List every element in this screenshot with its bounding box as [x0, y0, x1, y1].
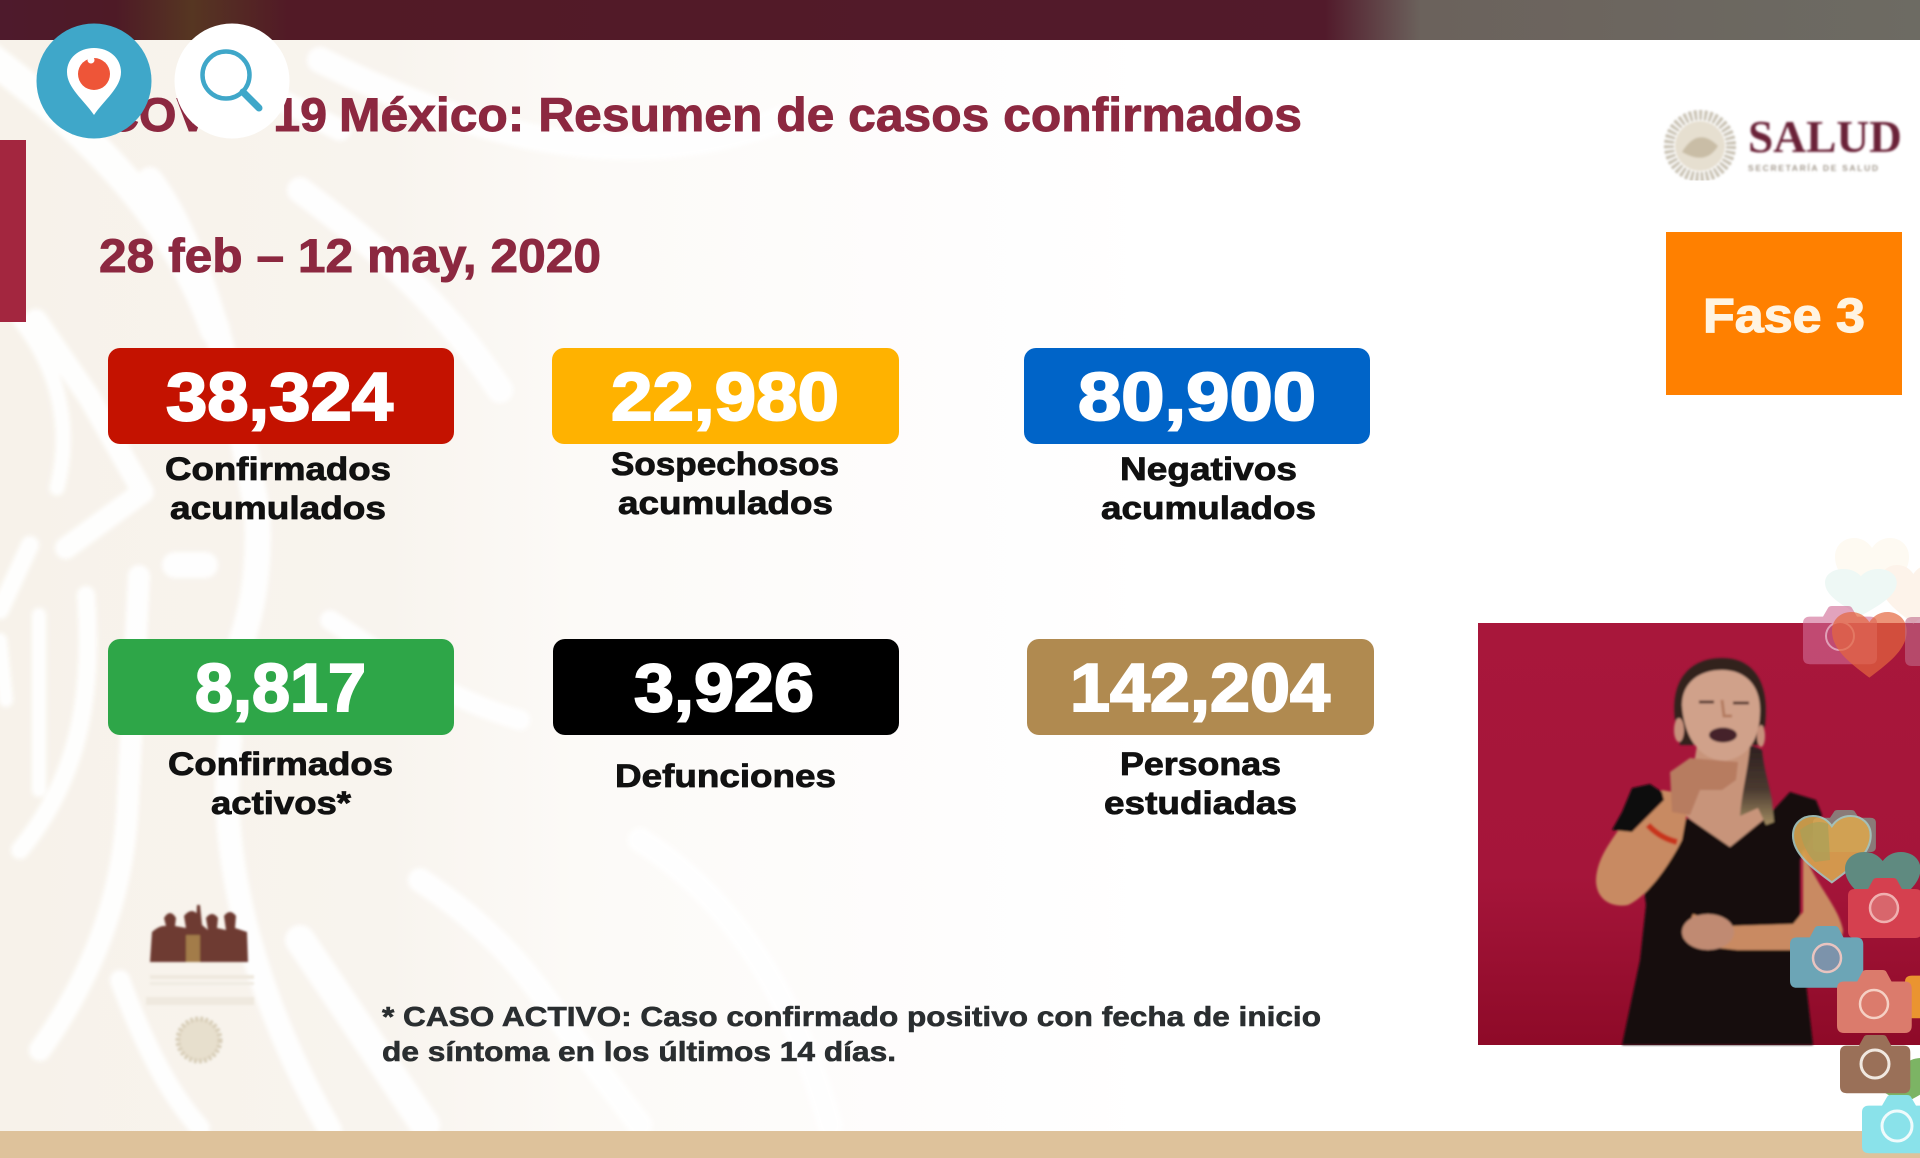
- icon: national emblem: [1669, 115, 1731, 177]
- black top: [1622, 792, 1822, 1045]
- neck and chest: [1686, 745, 1770, 850]
- brown camera: [1840, 1035, 1910, 1093]
- stat: defunciones: Defunciones: [615, 758, 836, 794]
- stat: sospechosos acumulados: acumulados: [618, 485, 833, 521]
- title: COVID-19: [104, 88, 327, 141]
- salmon camera: [1837, 970, 1912, 1033]
- red camera: [1848, 878, 1920, 938]
- faint peach heart: [1880, 565, 1920, 624]
- mouth: [1709, 728, 1737, 742]
- stat: confirmados acumulados: Confirmados: [165, 451, 391, 487]
- stat: confirmados activos: activos*: [211, 785, 352, 821]
- stat: defunciones: 3,926: [634, 650, 814, 726]
- pink camera: [1803, 606, 1877, 664]
- orange-red heart: [1832, 612, 1907, 678]
- phase badge: [1666, 232, 1902, 395]
- right arm and forearm: [1683, 850, 1843, 950]
- hair tail: [1740, 745, 1774, 825]
- grey camera: [1813, 810, 1876, 852]
- logo: Salud: [1669, 112, 1902, 177]
- left sleeve: [1612, 784, 1664, 832]
- faint cream heart: [1835, 538, 1909, 603]
- stat: confirmados acumulados: acumulados: [170, 490, 386, 526]
- stat: sospechosos acumulados: [552, 348, 899, 521]
- icon: figures silhouette: [150, 905, 248, 962]
- face: [1682, 670, 1760, 761]
- stat: personas estudiadas: [1027, 639, 1374, 821]
- title: México: Resumen de casos confirmados: [339, 88, 1302, 141]
- stat: confirmados activos: [108, 639, 454, 821]
- faint teal heart: [1825, 569, 1897, 616]
- stat: negativos acumulados: [1024, 348, 1370, 526]
- top browser bar: [0, 0, 1920, 40]
- stat: defunciones: [553, 639, 899, 794]
- interpreter figure: [1596, 658, 1843, 1045]
- logo: historical figures and emblem: [146, 905, 254, 1061]
- stat: sospechosos acumulados: Sospechosos: [611, 446, 839, 482]
- eyes and glasses: [1699, 702, 1749, 703]
- stat: confirmados activos: Confirmados: [168, 746, 393, 782]
- background ornamental pattern: [0, 50, 830, 1130]
- green heart: [1867, 1058, 1920, 1104]
- stat: personas estudiadas: 142,204: [1070, 650, 1330, 726]
- sign language interpreter video: [1478, 623, 1920, 1045]
- stat: negativos acumulados: acumulados: [1101, 490, 1316, 526]
- cyan camera: [1862, 1095, 1920, 1153]
- left forearm: [1596, 790, 1690, 906]
- footnote: * CASO ACTIVO: Caso confirmado positivo con fecha de inicio: [382, 1001, 1321, 1032]
- pink camera right: [1905, 606, 1920, 666]
- logo: Salud: SALUD: [1748, 112, 1902, 162]
- stat: personas estudiadas: estudiadas: [1104, 785, 1297, 821]
- orange camera: [1905, 966, 1920, 1018]
- stat: sospechosos acumulados: 22,980: [611, 359, 839, 435]
- stat: personas estudiadas: Personas: [1120, 746, 1281, 782]
- icon: search button: [174, 24, 290, 138]
- stat: negativos acumulados: 80,900: [1078, 359, 1316, 435]
- nose: [1722, 700, 1732, 716]
- date range subtitle: 28 feb – 12 may, 2020: [99, 229, 601, 282]
- bottom tan band: [0, 1131, 1920, 1158]
- footnote: de síntoma en los últimos 14 días.: [382, 1036, 896, 1067]
- golden heart: [1793, 816, 1871, 882]
- logo: Salud: SECRETARÍA DE SALUD: [1748, 163, 1878, 173]
- icon: periscope pin button: [36, 24, 152, 138]
- stat: negativos acumulados: Negativos: [1120, 451, 1297, 487]
- ears: [1674, 718, 1684, 742]
- stat: confirmados activos: 8,817: [195, 650, 366, 726]
- hand across body: [1682, 914, 1734, 950]
- phase badge: Fase 3: [1703, 290, 1865, 343]
- bracelet: [1648, 825, 1677, 842]
- stat: confirmados acumulados: [108, 348, 454, 526]
- floating reactions: hearts and cameras: [1790, 538, 1920, 1153]
- hair back: [1674, 658, 1766, 745]
- blue camera: [1790, 926, 1863, 988]
- teal heart: [1845, 852, 1920, 910]
- stat: confirmados acumulados: 38,324: [166, 359, 393, 435]
- raised hand: [1670, 758, 1738, 815]
- footnote: [382, 1001, 1321, 1067]
- left maroon accent bar: [0, 140, 26, 322]
